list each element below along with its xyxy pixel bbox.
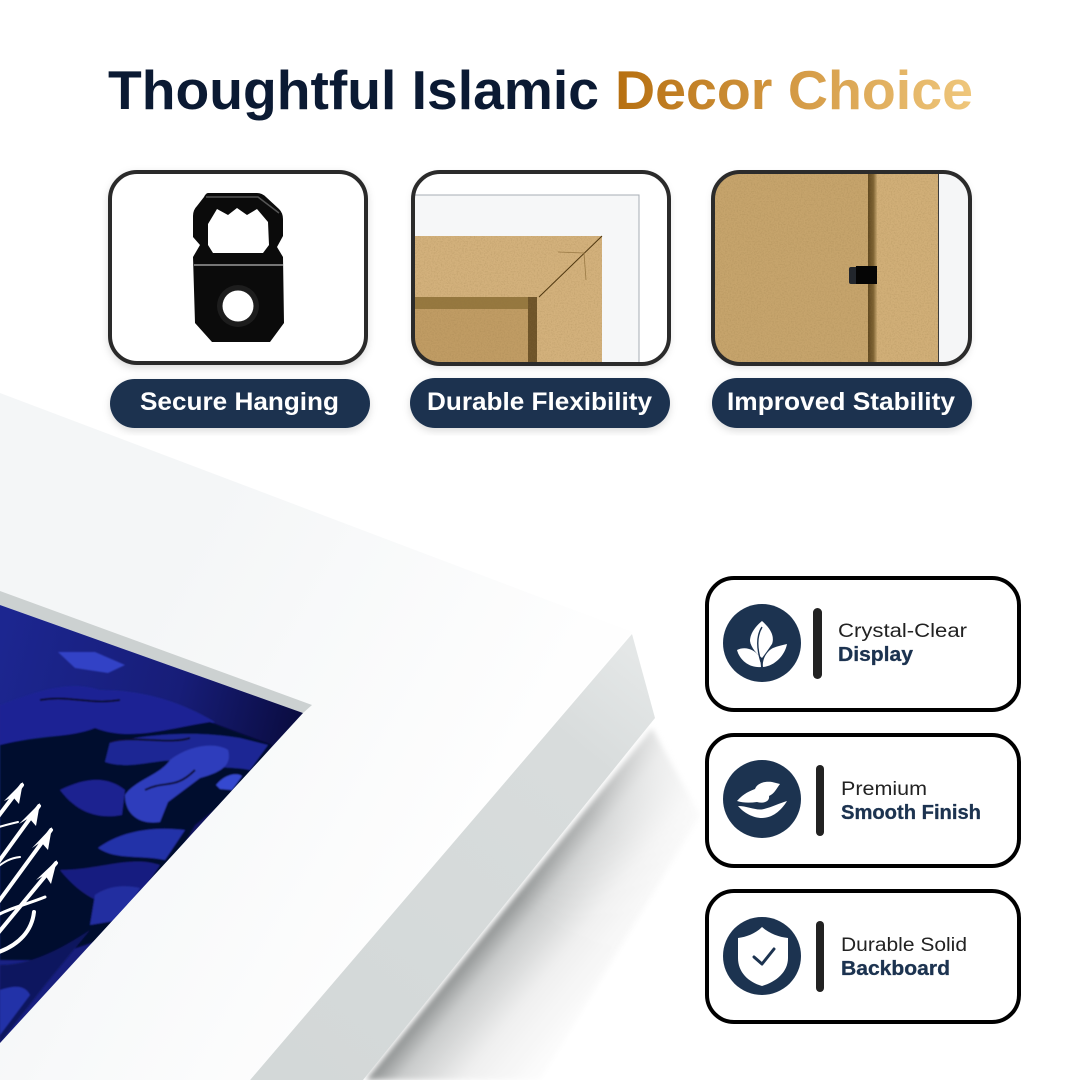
divider bar xyxy=(813,608,822,679)
frame drop shadow xyxy=(366,728,700,1080)
label: secure hanging: Secure Hanging xyxy=(140,388,339,416)
icon: leaves xyxy=(723,604,801,682)
fibreboard back xyxy=(713,172,939,364)
feature: crystal-clear display xyxy=(707,578,1019,710)
feature text xyxy=(841,779,981,824)
frame front face xyxy=(0,393,632,1080)
feature text: Backboard xyxy=(841,958,950,980)
label: durable flexibility: Durable Flexibility xyxy=(427,388,652,416)
icon: shield check xyxy=(723,917,801,995)
panel: secure hanging xyxy=(110,172,366,363)
label: secure hanging xyxy=(110,379,370,428)
panel: improved stability xyxy=(713,172,970,364)
calligraphy arrows xyxy=(0,785,56,953)
feature text: Display xyxy=(838,644,914,666)
feature text: Smooth Finish xyxy=(841,802,981,824)
feature text: Crystal-Clear xyxy=(838,621,968,642)
feature text: Durable Solid xyxy=(841,935,967,956)
title xyxy=(108,59,973,121)
label: durable flexibility xyxy=(410,378,670,428)
feature text xyxy=(841,935,967,980)
feature text: Premium xyxy=(841,779,927,800)
panel: durable flexibility xyxy=(413,172,669,367)
label: improved stability xyxy=(712,378,972,428)
photo: white frame corner xyxy=(0,393,700,1080)
fibreboard corner xyxy=(413,236,602,367)
frame inner lip xyxy=(0,591,312,713)
icon: sawtooth hanger xyxy=(193,193,284,342)
black clip xyxy=(849,266,877,284)
icon: smooth fabric xyxy=(723,760,801,838)
white mat xyxy=(413,195,639,365)
artwork: blue marble calligraphy xyxy=(0,600,310,1050)
title: Thoughtful Islamic xyxy=(108,59,599,121)
title: Decor Choice xyxy=(615,59,973,121)
feature: durable solid backboard xyxy=(707,891,1019,1022)
feature: premium smooth finish xyxy=(707,735,1019,866)
divider bar xyxy=(816,765,824,836)
frame side bevel xyxy=(250,634,655,1080)
divider bar xyxy=(816,921,824,992)
label: improved stability: Improved Stability xyxy=(727,388,955,416)
feature text xyxy=(838,621,968,666)
